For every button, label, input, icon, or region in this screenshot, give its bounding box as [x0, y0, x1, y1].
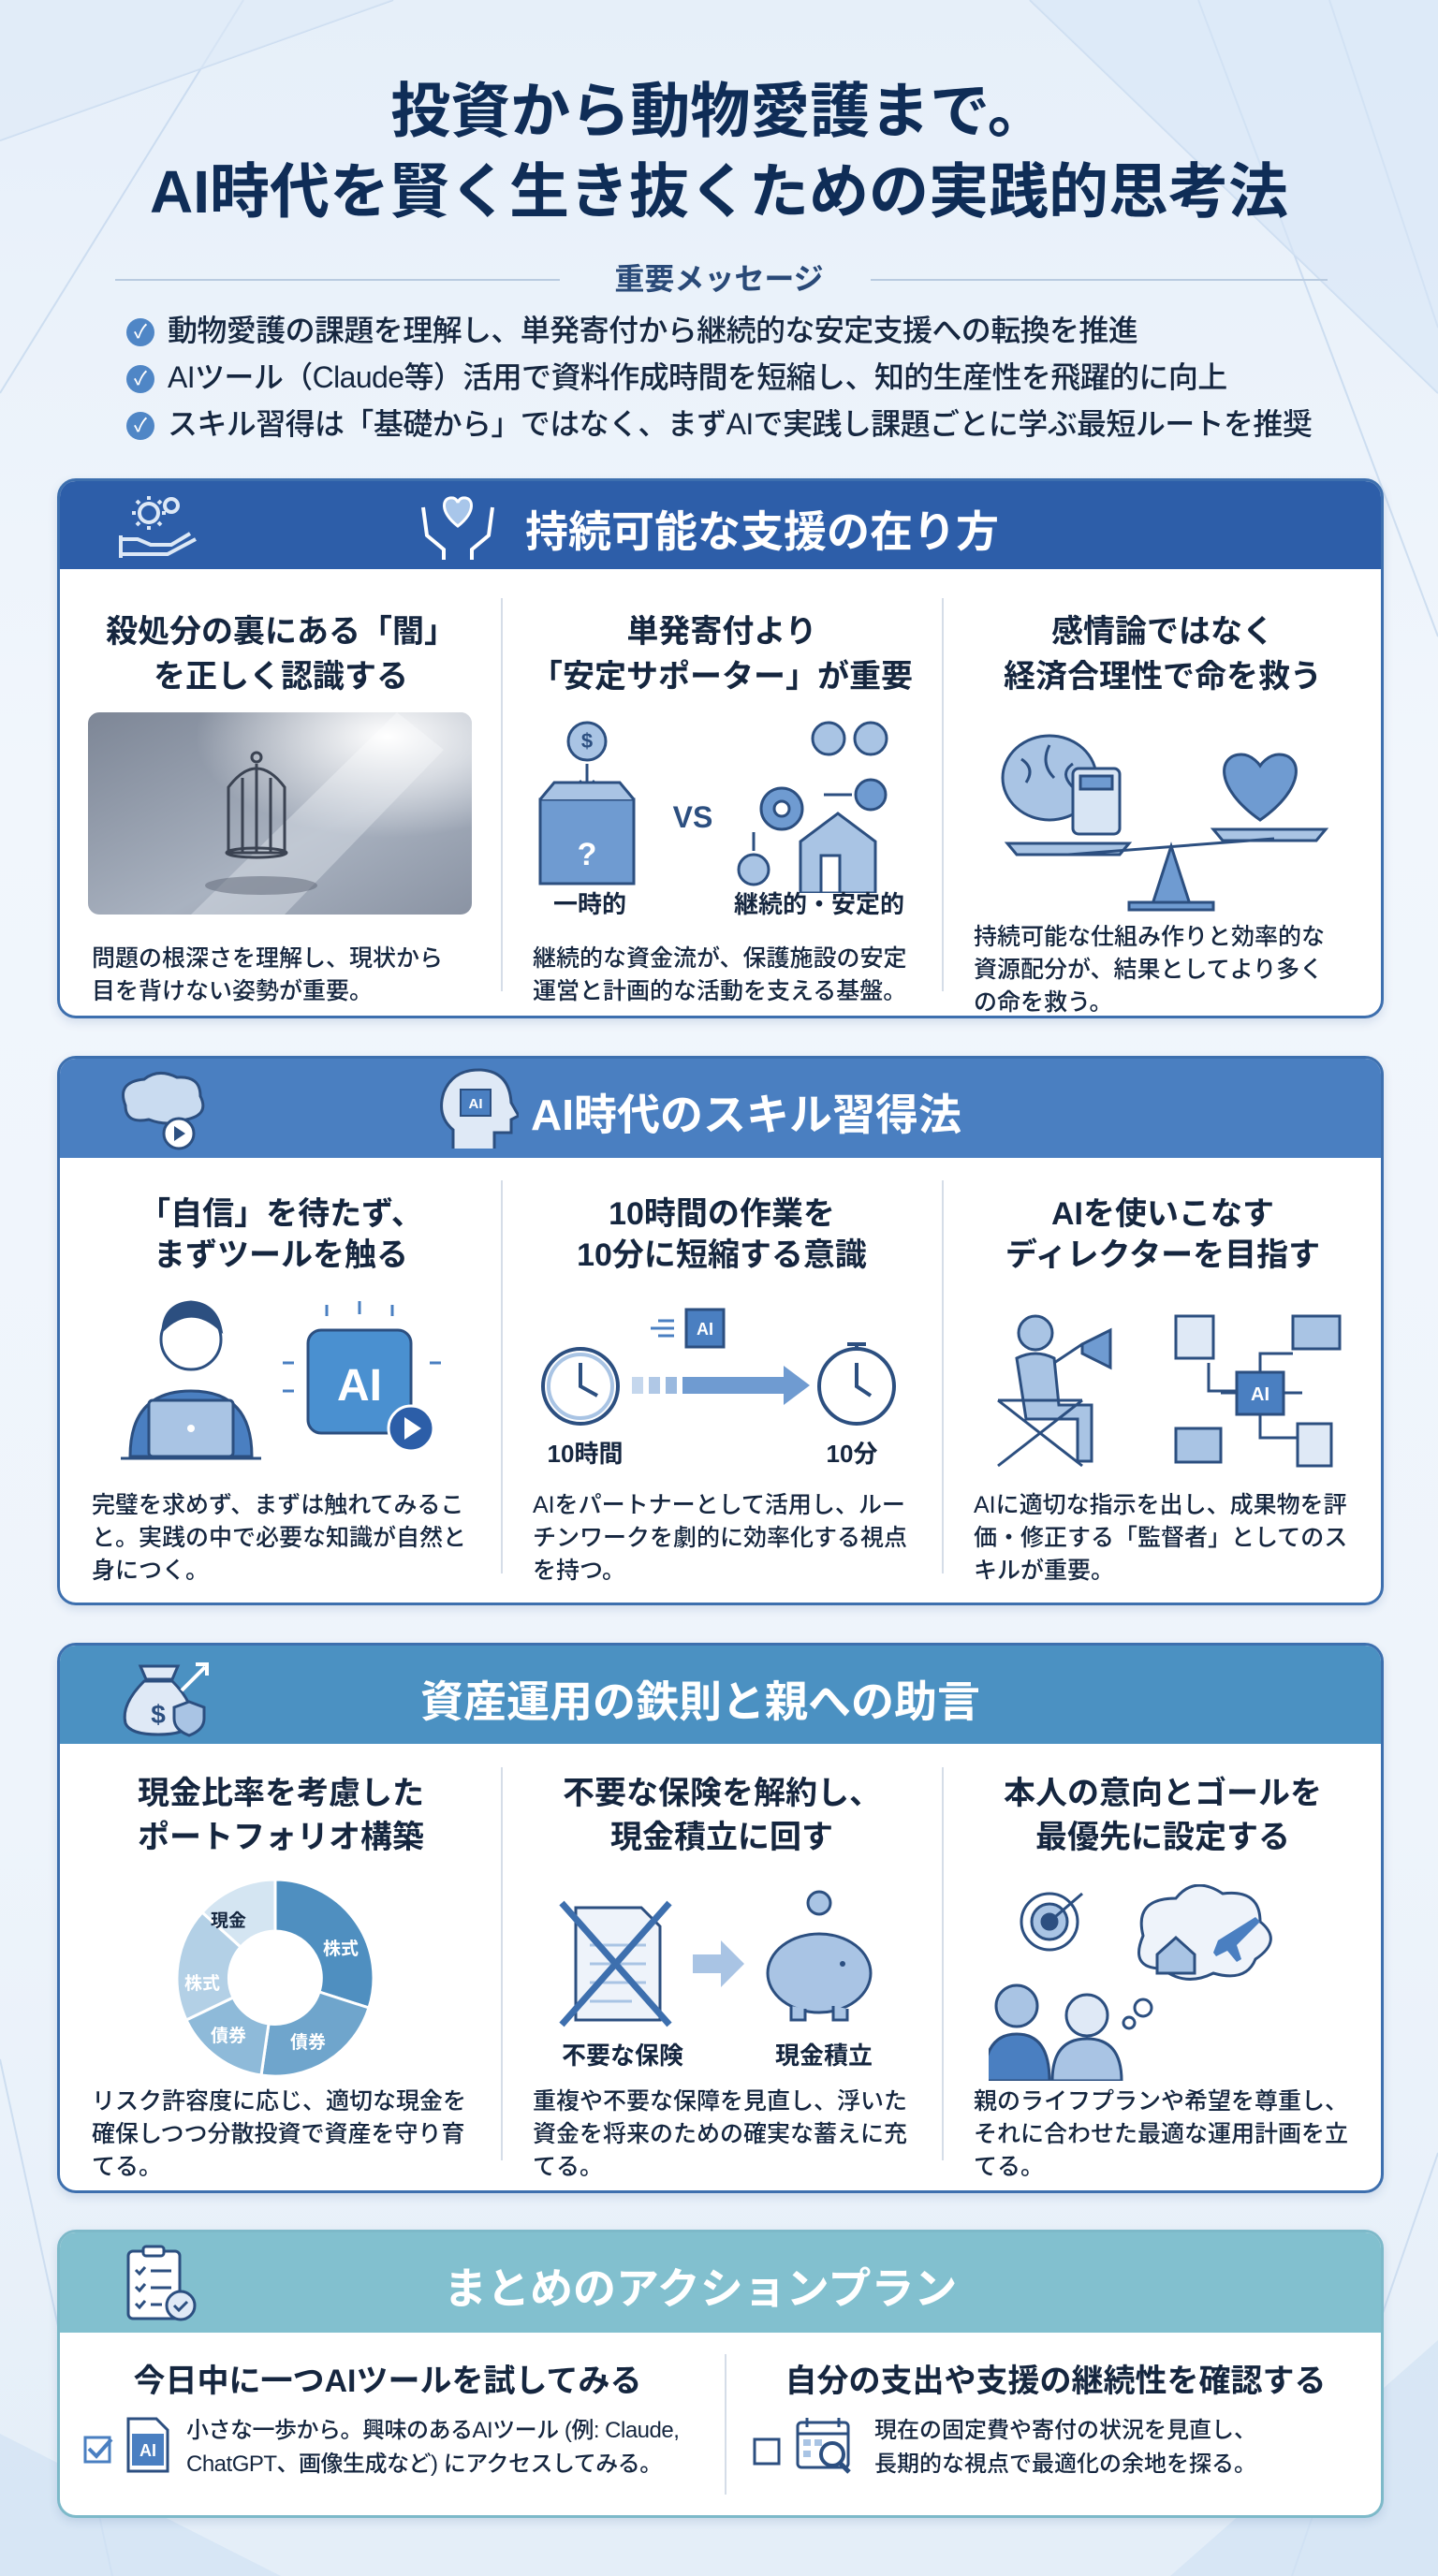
column: dark side: 問題の根深さを理解し、現状から目を背けない姿勢が重要。: [92, 945, 443, 1004]
column: portfolio: リスク許容度に応じ、適切な現金を確保しつつ分散投資で資産を守り育てる。: [92, 2088, 466, 2180]
icon: clipboard checklist: [127, 2245, 197, 2321]
column: economic rationality: 感情論ではなく: [1051, 614, 1274, 650]
column: 10 hours to 10 min: 10時間: [548, 1440, 623, 1468]
header band: [60, 1646, 1381, 1744]
illustration: person with laptop and AI tile: AI: [337, 1361, 382, 1411]
panel: AI-era skills: [57, 1056, 1384, 1605]
action: check spending: 自分の支出や支援の継続性を確認する: [785, 2364, 1326, 2399]
action: check spending: 長期的な視点で最適化の余地を探る。: [874, 2452, 1256, 2477]
column: cancel insurance: [533, 1776, 907, 2180]
column: economic rationality: [974, 614, 1329, 1016]
column: director: [974, 1196, 1347, 1584]
action: check spending: 現在の固定費や寄付の状況を見直し、: [874, 2418, 1256, 2443]
column: stable supporters: 継続的・安定的: [734, 890, 904, 918]
illustration: one-time vs continuous: $: [581, 729, 593, 753]
column: dark side: を正しく認識する: [154, 659, 408, 695]
illustration: person with laptop and AI tile: [121, 1301, 441, 1460]
column: portfolio: ポートフォリオ構築: [138, 1820, 424, 1855]
column: director: ディレクターを目指す: [1005, 1237, 1320, 1273]
icon: gears and hand: [119, 496, 197, 558]
column: stable supporters: 単発寄付より: [626, 614, 817, 650]
header band: AI時代のスキル習得法: [531, 1090, 961, 1139]
donut chart: 株式: [323, 1939, 359, 1959]
action: try AI tool: 今日中に一つAIツールを試してみる: [133, 2364, 641, 2399]
column: stable supporters: 継続的な資金流が、保護施設の安定運営と計画的な活動を支える基盤。: [533, 945, 907, 1004]
header band: [60, 2232, 1381, 2333]
header band: 持続可能な支援の在り方: [525, 507, 999, 556]
column: parents' goals: 最優先に設定する: [1035, 1820, 1290, 1855]
key messages heading: 重要メッセージ: [614, 262, 824, 296]
column: cancel insurance: 重複や不要な保障を見直し、浮いた資金を将来のための確実な蓄えに充てる。: [533, 2088, 907, 2180]
icon: head with AI chip: AI: [468, 1096, 483, 1112]
header band: [60, 1059, 1381, 1158]
column: cancel insurance: 不要な保険を解約し、: [563, 1776, 881, 1811]
column: economic rationality: 経済合理性で命を救う: [1004, 659, 1322, 695]
column: touch tools first: [92, 1196, 466, 1584]
icon: money bag with shield: $: [151, 1700, 166, 1729]
column: dark side: [88, 614, 472, 1004]
column: touch tools first: 完璧を求めず、まずは触れてみること。実践の中で必要な知識が自然と身につく。: [92, 1492, 466, 1584]
bullet list: ✓: [134, 369, 147, 389]
donut chart: 債券: [290, 2032, 326, 2053]
column: economic rationality: 持続可能な仕組み作りと効率的な資源配分が、結果としてより多くの命を救う。: [974, 924, 1325, 1016]
column: touch tools first: 「自信」を待たず、: [139, 1196, 423, 1232]
column: 10 hours to 10 min: AIをパートナーとして活用し、ルーチンワークを劇的に効率化する視点を持つ。: [533, 1492, 907, 1584]
donut chart: [178, 1881, 373, 2075]
donut chart: 現金: [211, 1910, 246, 1931]
donut chart: 株式: [184, 1973, 220, 1994]
illustration: one-time vs continuous: ?: [578, 837, 596, 872]
title: 投資から動物愛護まで。: [390, 78, 1048, 145]
column: cancel insurance: 不要な保険: [562, 2042, 683, 2070]
bullet list: スキル習得は「基礎から」ではなく、まずAIで実践し課題ごとに学ぶ最短ルートを推奨: [168, 407, 1312, 441]
column: parents' goals: 本人の意向とゴールを: [1004, 1776, 1322, 1811]
column: cancel insurance: 現金積立に回す: [610, 1820, 833, 1855]
illustration: clocks and arrow: AI: [697, 1320, 713, 1339]
illustration: cage in dark room: [88, 712, 472, 915]
action: try AI tool: [84, 2364, 679, 2477]
icon: hands with heart: [421, 496, 494, 560]
title: AI時代を賢く生き抜くための実践的思考法: [150, 158, 1288, 226]
icon: brain with play: [122, 1071, 204, 1149]
panel: asset management: [57, 1643, 1384, 2193]
illustration: balance scale brain and heart: [1002, 734, 1329, 912]
column: dark side: 殺処分の裏にある「闇」: [106, 614, 456, 650]
illustration: clocks and arrow: [541, 1309, 896, 1426]
icon: money bag with shield: [124, 1662, 209, 1737]
header band: まとめのアクションプラン: [444, 2264, 957, 2313]
column: cancel insurance: 現金積立: [775, 2042, 873, 2070]
illustration: director with megaphone and AI flow: [997, 1314, 1341, 1468]
column: parents' goals: 親のライフプランや希望を尊重し、それに合わせた最適な運用計画を立てる。: [974, 2088, 1348, 2180]
icon: head with AI chip: [440, 1069, 519, 1149]
illustration: couple with dream cloud and target: [989, 1884, 1272, 2081]
column: 10 hours to 10 min: 10分: [827, 1440, 877, 1468]
icon: empty box and calendar magnifier: [753, 2418, 851, 2474]
header band: 資産運用の鉄則と親への助言: [420, 1677, 980, 1726]
column: parents' goals: [974, 1776, 1348, 2180]
column: director: AIに適切な指示を出し、成果物を評価・修正する「監督者」としてのスキルが重要。: [974, 1492, 1347, 1584]
column: portfolio: 現金比率を考慮した: [138, 1776, 424, 1811]
column: 10 hours to 10 min: 10分に短縮する意識: [577, 1237, 867, 1273]
bullet list: ✓: [134, 416, 147, 436]
column: 10 hours to 10 min: [533, 1196, 907, 1584]
illustration: one-time vs continuous: VS: [673, 800, 712, 834]
action: try AI tool: ChatGPT、画像生成など) にアクセスしてみる。: [186, 2452, 662, 2477]
key messages: [115, 262, 1328, 441]
column: stable supporters: 一時的: [553, 890, 626, 918]
donut chart: 債券: [211, 2026, 246, 2046]
illustration: one-time vs continuous: [539, 721, 888, 893]
bullet list: [126, 314, 1312, 441]
bullet list: AIツール（Claude等）活用で資料作成時間を短縮し、知的生産性を飛躍的に向上: [168, 360, 1227, 394]
bullet list: 動物愛護の課題を理解し、単発寄付から継続的な安定支援への転換を推進: [168, 314, 1137, 347]
panel: sustainable support: [57, 478, 1384, 1018]
column: 10 hours to 10 min: 10時間の作業を: [609, 1196, 835, 1232]
column: touch tools first: まずツールを触る: [154, 1237, 408, 1273]
icon: checked box and AI doc: [84, 2417, 169, 2473]
illustration: crossed document to piggy bank: [559, 1891, 873, 2027]
header band: [60, 481, 1381, 569]
column: director: AIを使いこなす: [1051, 1196, 1274, 1232]
illustration: director with megaphone and AI flow: AI: [1251, 1384, 1269, 1405]
title: [150, 78, 1288, 226]
panel: action plan: [57, 2230, 1384, 2518]
action: try AI tool: 小さな一歩から。興味のあるAIツール (例: Claude,: [186, 2418, 679, 2443]
action: check spending: [753, 2364, 1326, 2477]
column: stable supporters: [531, 614, 913, 1004]
icon: checked box and AI doc: AI: [139, 2441, 156, 2460]
bullet list: ✓: [134, 322, 147, 343]
column: portfolio: [92, 1776, 466, 2180]
column: stable supporters: 「安定サポーター」が重要: [531, 659, 913, 695]
